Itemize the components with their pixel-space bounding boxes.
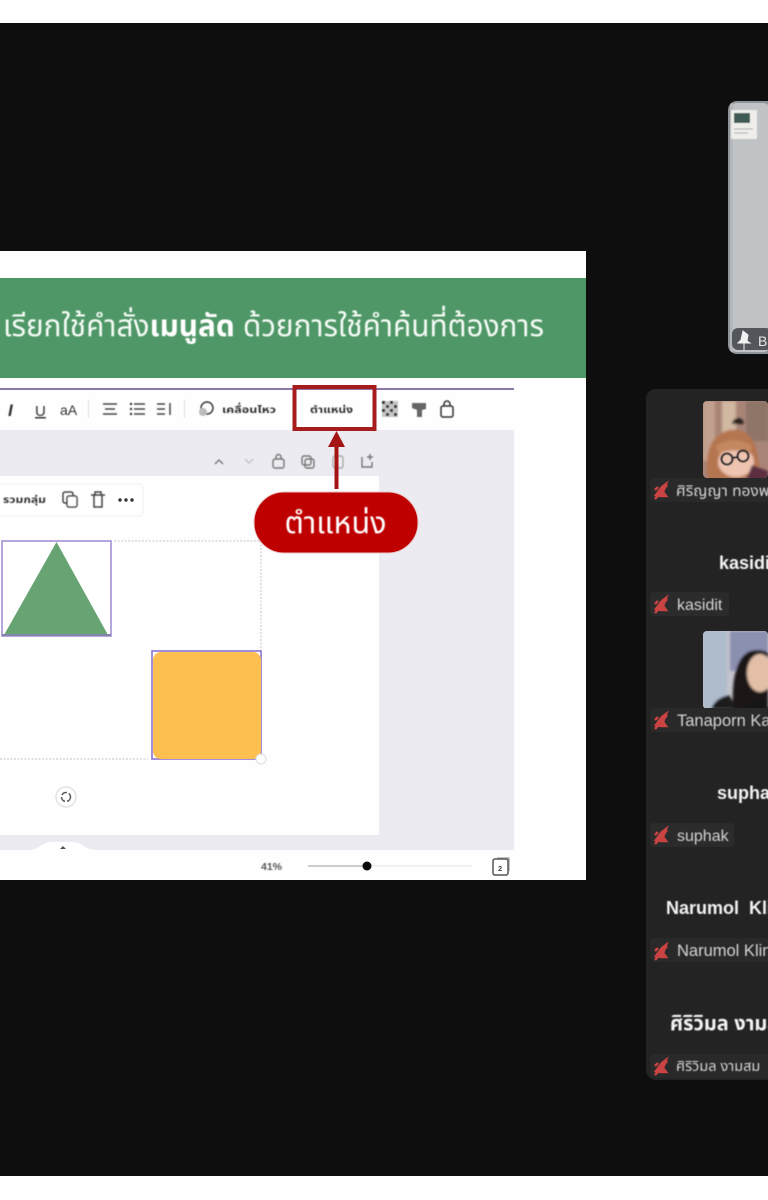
callout: position label: ตำแหน่ง <box>284 507 386 540</box>
participant: Tanaporn <box>650 631 768 732</box>
participant: Sirivimol <box>650 1013 768 1078</box>
name tag: kasidit <box>677 597 723 614</box>
participant: suphak <box>650 783 768 847</box>
yellow square shape <box>152 651 266 764</box>
participant photo <box>703 631 768 712</box>
name tag: Tanaporn Ka <box>677 712 768 730</box>
selection outline <box>0 541 261 759</box>
callout: position label <box>254 492 418 553</box>
speaker name tag <box>732 328 768 350</box>
wall thermostat <box>731 110 757 139</box>
editor toolbar: I <box>8 401 14 420</box>
name tag: ศิริญญา ทองพ <box>676 483 768 500</box>
editor toolbar: aA <box>60 402 78 418</box>
floating group toolbar: รวมกลุ่ม <box>3 493 46 506</box>
green triangle shape <box>2 541 111 636</box>
panel: participant list <box>646 389 768 1080</box>
editor toolbar: ตำแหน่ง <box>310 403 353 416</box>
slide heading banner: เรียกใช้คำสั่งเมนูลัด ด้วยการใช้คำค้นที่ต้องการ <box>3 305 544 344</box>
name tag: suphak <box>677 828 730 845</box>
participant: kasidit <box>650 553 768 616</box>
arrow: callout to position button <box>328 431 345 489</box>
canvas page controls <box>215 454 373 468</box>
rotate handle <box>56 787 76 807</box>
editor status bar: 2 <box>498 864 502 873</box>
speaker name tag: B <box>758 333 767 349</box>
participant photo <box>703 401 768 480</box>
editor workspace <box>0 388 514 850</box>
floating group toolbar <box>0 484 143 516</box>
participant: first <box>650 401 768 502</box>
editor toolbar: เคลื่อนไหว <box>222 402 276 416</box>
editor status bar: 41% <box>261 861 283 873</box>
panel: speaker video <box>728 101 768 354</box>
editor status bar <box>0 842 586 880</box>
editor toolbar <box>8 400 453 420</box>
participant: Narumol <box>650 898 768 962</box>
callout highlight box <box>294 387 374 429</box>
panel: shared slide <box>0 251 586 880</box>
editor toolbar: U <box>35 403 46 420</box>
name tag: ศิริวิมล งามสม <box>676 1059 760 1075</box>
slide heading banner <box>0 278 586 378</box>
